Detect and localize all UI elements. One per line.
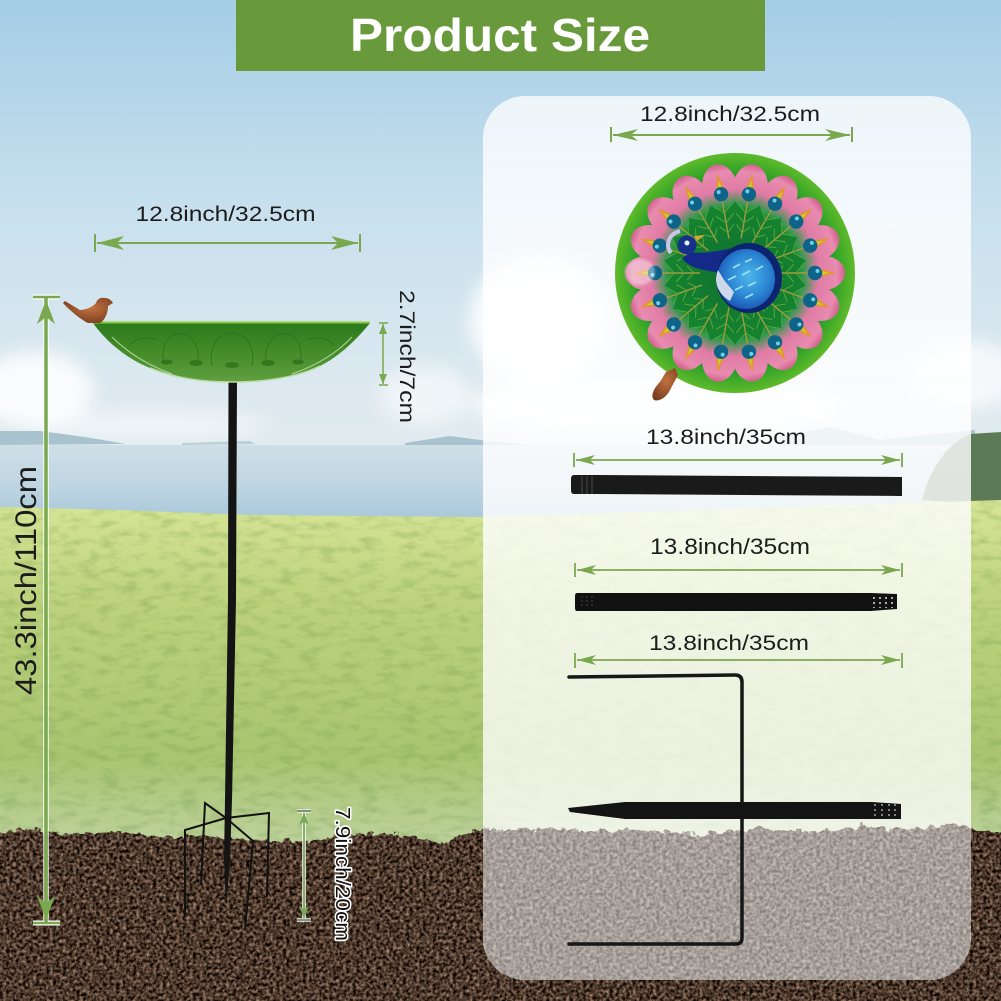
dimension: overall height: 43.3inch/110cm [10, 466, 43, 695]
dimension: middle pole [575, 534, 902, 577]
dimension: top view diameter [611, 102, 852, 142]
dimension: stake and fork [575, 631, 902, 668]
bowl [93, 322, 370, 382]
background: clouds [0, 255, 1001, 439]
U-shaped fork bracket [569, 675, 742, 944]
ground fork [185, 803, 269, 930]
background: soil [0, 824, 1001, 1001]
pointed stake segment [568, 802, 901, 819]
middle pole segment [575, 593, 897, 611]
dimension: ground stake depth: 7.9inch/20cm [331, 807, 353, 941]
translucent panel [483, 96, 971, 980]
dimension: bowl diameter [95, 202, 360, 252]
title banner [236, 0, 765, 71]
peacock figure [668, 231, 782, 313]
background: grass [0, 500, 1001, 850]
dimension: bowl diameter: 12.8inch/32.5cm [136, 202, 316, 226]
background: sky [0, 0, 1001, 460]
feather ring [625, 162, 845, 384]
peacock bowl top view [615, 153, 855, 400]
title banner: Product Size [350, 9, 650, 61]
small bird on rim [63, 298, 113, 323]
dimension: stake and fork: 13.8inch/35cm [649, 631, 809, 655]
small bird on bowl edge [652, 368, 678, 400]
dimension: bowl depth [379, 290, 419, 423]
dimension: top view diameter: 12.8inch/32.5cm [640, 102, 820, 126]
pale glare on left feather [625, 259, 655, 285]
background: distant islands [0, 427, 975, 445]
dimension: middle pole: 13.8inch/35cm [650, 534, 810, 559]
dimension: ground stake depth [297, 807, 353, 941]
dimension: upper pole [574, 425, 902, 467]
upper pole segment [571, 475, 902, 496]
left assembled bird bath [63, 298, 370, 930]
soil seen through panel [483, 822, 971, 980]
background: sea [0, 445, 1001, 520]
pole [224, 380, 237, 908]
dimension: overall height [10, 297, 60, 923]
background: trees at right [922, 432, 1001, 505]
dimension: bowl depth: 2.7inch/7cm [395, 290, 419, 423]
dimension: upper pole: 13.8inch/35cm [646, 425, 806, 449]
